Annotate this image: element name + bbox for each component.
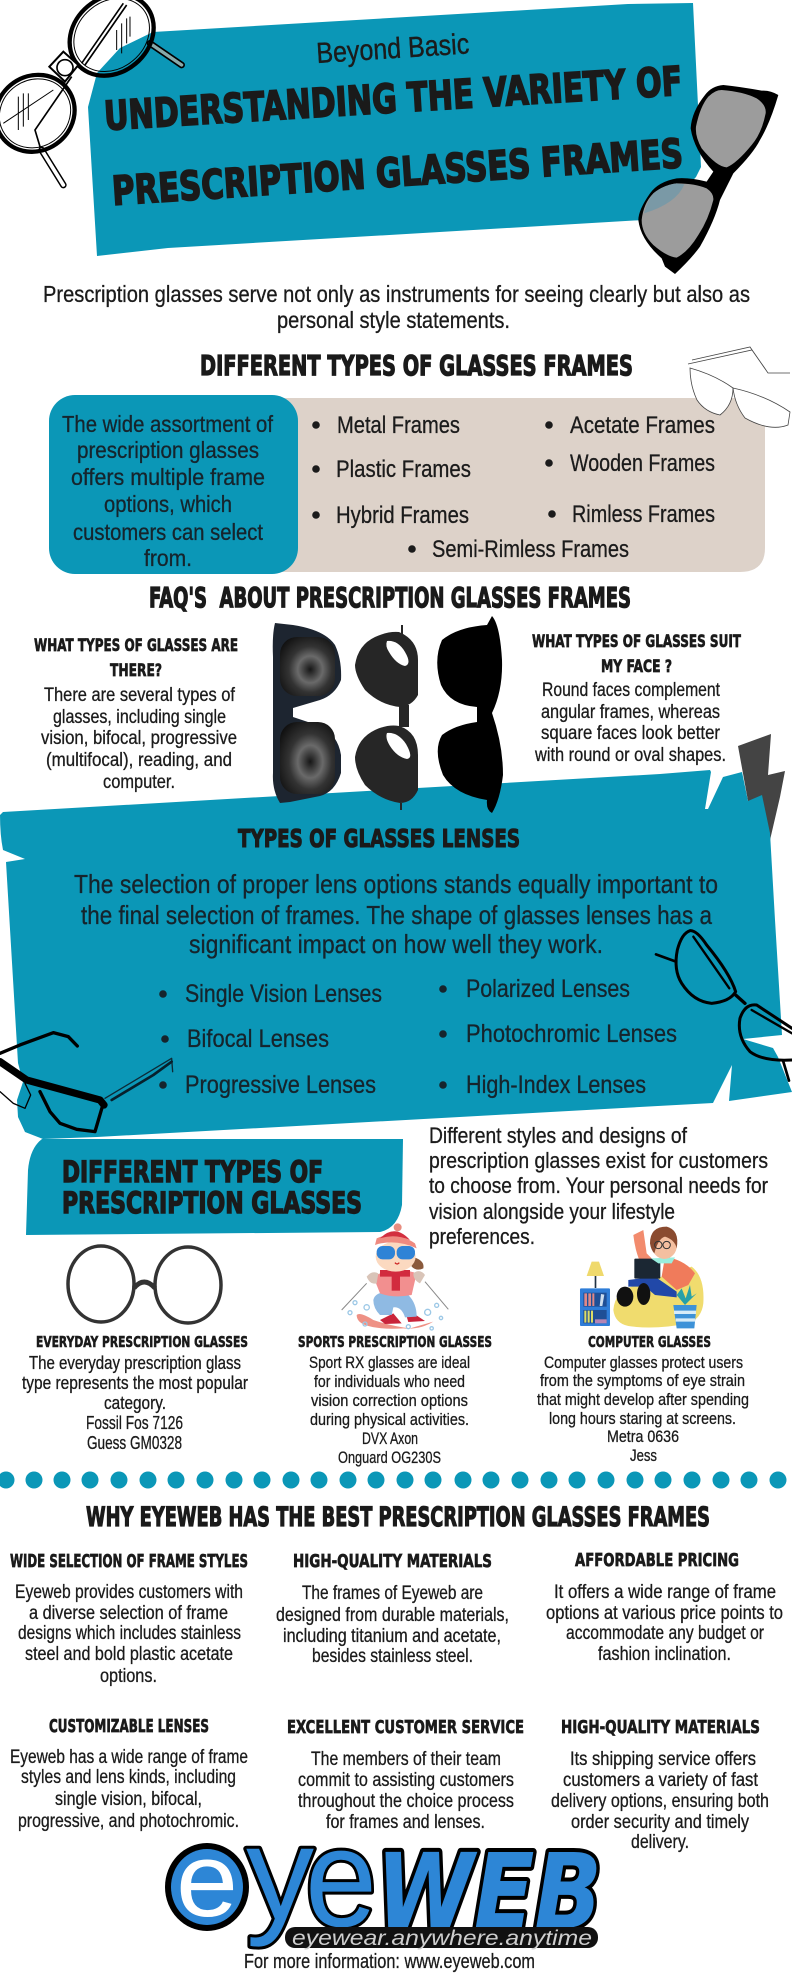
list: frame types: Semi-Rimless Frames [432, 536, 629, 563]
logo: eyeweb: e [176, 1822, 238, 1939]
icon: sketch glasses top right [688, 347, 790, 427]
reason: shipping: order security and timely [571, 1812, 749, 1833]
reason: customizable lenses: CUSTOMIZABLE LENSES [49, 1716, 209, 1737]
kicker: Beyond Basic: Beyond Basic [315, 28, 470, 70]
reason: wide selection [10, 1551, 248, 1687]
reason: customizable lenses: Eyeweb has a wide range of frame [10, 1747, 248, 1768]
reason: shipping [551, 1717, 769, 1853]
card: sports prescription glasses: during physical activities. [310, 1410, 469, 1429]
logo: eyeweb [165, 1799, 602, 1956]
panel: teal frames intro: The wide assortment of [62, 411, 274, 437]
FAQ: left question: THERE? [110, 661, 162, 681]
logo: eyeweb: eyewear.anywhere.anytime [292, 1927, 592, 1950]
panel: header banner [88, 3, 701, 256]
paragraph: styles and designs [429, 1123, 768, 1249]
card: sports prescription glasses: SPORTS PRESCRIPTION GLASSES [298, 1333, 492, 1351]
card: computer glasses: Jess [630, 1446, 657, 1465]
FAQ: left question: glasses, including single [53, 707, 226, 728]
logo: eyeweb: WEB [376, 1831, 602, 1953]
card: everyday prescription glasses: Guess GM0328 [87, 1433, 182, 1453]
reason: excellent customer service: The members of their team [311, 1749, 501, 1770]
reason: high-quality materials: HIGH-QUALITY MATERIALS [293, 1551, 492, 1572]
panel: teal frames intro: customers can select [73, 519, 264, 545]
reason: high-quality materials: designed from durable materials, [276, 1605, 509, 1626]
FAQ: right question: square faces look better [541, 723, 721, 744]
icon: black rectangular glasses left [0, 1033, 173, 1132]
card: computer glasses: long hours staring at screens. [549, 1409, 736, 1428]
heading: types of lenses: TYPES OF GLASSES LENSES [238, 824, 520, 853]
list: lens types: Single Vision Lenses [185, 980, 382, 1008]
list: frame types: Wooden Frames [570, 450, 715, 477]
list: frame types: Rimless Frames [572, 501, 715, 528]
reason: wide selection: options. [100, 1666, 157, 1687]
card: computer glasses: Metra 0636 [607, 1427, 679, 1446]
reason: excellent customer service: EXCELLENT CUSTOMER SERVICE [287, 1717, 524, 1738]
icon: round glasses [68, 1246, 221, 1323]
list: frame types [312, 412, 715, 563]
card: sports prescription glasses: for individuals who need [314, 1372, 465, 1391]
intro text [43, 281, 750, 333]
lenses paragraph: The selection of proper lens options stands equally important to [74, 869, 718, 899]
logo: eyeweb: y [246, 1800, 315, 1948]
reason: high-quality materials: The frames of Eyeweb are [302, 1583, 483, 1604]
paragraph: styles and designs: Different styles and designs of [429, 1123, 688, 1148]
reason: wide selection: a diverse selection of frame [29, 1603, 228, 1624]
reason: excellent customer service: throughout the choice process [298, 1791, 514, 1812]
list: lens types: Bifocal Lenses [187, 1025, 329, 1053]
icon: lightning bolt [738, 734, 785, 840]
reason: customizable lenses: single vision, bifocal, [55, 1789, 202, 1810]
icon: aviator sunglasses [355, 625, 418, 810]
card: computer glasses: that might develop after spending [537, 1390, 749, 1409]
reason: affordable pricing: fashion inclination. [598, 1644, 731, 1665]
card: computer glasses: Computer glasses protect users [544, 1353, 743, 1372]
panel: teal lenses section [0, 770, 792, 1139]
lenses paragraph: significant impact on how well they work. [189, 929, 603, 959]
footer: more information: For more information: www.eyeweb.com [244, 1951, 535, 1973]
card: computer glasses: from the symptoms of eye strain [540, 1371, 745, 1390]
reason: wide selection: steel and bold plastic acetate [25, 1644, 233, 1665]
intro text: personal style statements. [277, 307, 510, 333]
card: computer glasses: COMPUTER GLASSES [588, 1333, 711, 1351]
panel: teal frames intro: prescription glasses [77, 437, 259, 463]
list: lens types: Photochromic Lenses [466, 1020, 677, 1048]
panel: teal frames intro: from. [144, 545, 192, 571]
FAQ: right question [532, 632, 741, 766]
reason: shipping: Its shipping service offers [570, 1749, 756, 1770]
list: lens types: Polarized Lenses [466, 975, 630, 1003]
icon: thin line glasses right [656, 931, 792, 1081]
card: sports prescription glasses: DVX Axon [362, 1429, 418, 1448]
icon: navy gradient sunglasses [273, 623, 341, 803]
paragraph: styles and designs: vision alongside your lifestyle [429, 1199, 675, 1224]
FAQ: right question: with round or oval shapes. [534, 745, 726, 766]
card: sports prescription glasses [298, 1333, 492, 1467]
FAQ: right question: angular frames, whereas [541, 702, 720, 723]
reason: high-quality materials: besides stainless steel. [312, 1646, 473, 1667]
icon: person on beanbag with laptop [580, 1227, 704, 1328]
icon: dark sunglasses top right [638, 85, 778, 274]
card: computer glasses [537, 1333, 749, 1465]
banner: different types of prescription glasses: PRESCRIPTION GLASSES [62, 1186, 362, 1220]
FAQ: left question: There are several types of [44, 685, 236, 706]
icon: black silhouette sunglasses [437, 616, 503, 813]
banner: different types of prescription glasses [26, 1139, 403, 1235]
reason: customizable lenses: styles and lens kinds, including [21, 1767, 236, 1788]
card: sports prescription glasses: Sport RX glasses are ideal [309, 1353, 470, 1372]
FAQ: left question: computer. [103, 772, 175, 793]
card: everyday prescription glasses: type represents the most popular [22, 1373, 248, 1393]
reason: shipping: delivery. [631, 1832, 689, 1853]
FAQ: right question: Round faces complement [542, 680, 721, 701]
reason: excellent customer service: for frames and lenses. [326, 1812, 485, 1833]
FAQ: left question [34, 636, 238, 793]
list: frame types: Metal Frames [337, 412, 460, 439]
list: lens types: Progressive Lenses [185, 1071, 376, 1099]
list: lens types: High-Index Lenses [466, 1071, 646, 1099]
reason: excellent customer service [287, 1717, 524, 1833]
card: everyday prescription glasses: category. [104, 1393, 166, 1413]
reason: excellent customer service: commit to assisting customers [298, 1770, 514, 1791]
reason: customizable lenses: progressive, and photochromic. [18, 1811, 239, 1832]
title [103, 59, 684, 215]
reason: affordable pricing [546, 1550, 783, 1665]
paragraph: styles and designs: preferences. [429, 1224, 535, 1249]
card: everyday prescription glasses [22, 1333, 248, 1453]
card: everyday prescription glasses: The everyday prescription glass [29, 1353, 241, 1373]
reason: shipping: customers a variety of fast [563, 1770, 759, 1791]
reason: high-quality materials [276, 1551, 509, 1667]
banner: different types of prescription glasses: DIFFERENT TYPES OF [62, 1155, 323, 1189]
list: frame types: Plastic Frames [336, 456, 471, 483]
card: everyday prescription glasses: Fossil Fos 7126 [86, 1413, 183, 1433]
reason: wide selection: WIDE SELECTION OF FRAME STYLES [10, 1551, 248, 1572]
panel: teal frames intro: offers multiple frame [71, 464, 265, 490]
FAQ: left question: vision, bifocal, progressive [41, 728, 237, 749]
reason: wide selection: designs which includes stainless [18, 1623, 241, 1644]
icon: skier illustration [342, 1223, 448, 1330]
icon: three sunglasses silhouettes [273, 616, 503, 813]
card: everyday prescription glasses: EVERYDAY PRESCRIPTION GLASSES [36, 1333, 248, 1351]
logo: eyeweb: e [305, 1799, 377, 1956]
FAQ: left question: (multifocal), reading, and [46, 750, 232, 771]
card: sports prescription glasses: Onguard OG230S [338, 1448, 441, 1467]
reason: wide selection: Eyeweb provides customers with [15, 1582, 243, 1603]
reason: high-quality materials: including titanium and acetate, [283, 1626, 501, 1647]
panel: beige frames list [280, 398, 765, 572]
panel: teal frames intro: options, which [104, 491, 232, 517]
card: sports prescription glasses: vision correction options [311, 1391, 468, 1410]
reason: customizable lenses [10, 1716, 248, 1832]
icon: line-art glasses top left [0, 0, 182, 185]
FAQ: right question: MY FACE ? [601, 657, 672, 677]
list: lens types [159, 975, 677, 1099]
lenses paragraph [74, 869, 718, 959]
dotted separator [0, 1472, 786, 1488]
list: frame types: Acetate Frames [570, 412, 715, 439]
lenses paragraph: the final selection of frames. The shape of glasses lenses has a [81, 900, 712, 930]
panel: teal frames intro [49, 395, 298, 574]
list: frame types: Hybrid Frames [336, 502, 469, 529]
FAQ: left question: WHAT TYPES OF GLASSES ARE [34, 636, 238, 656]
